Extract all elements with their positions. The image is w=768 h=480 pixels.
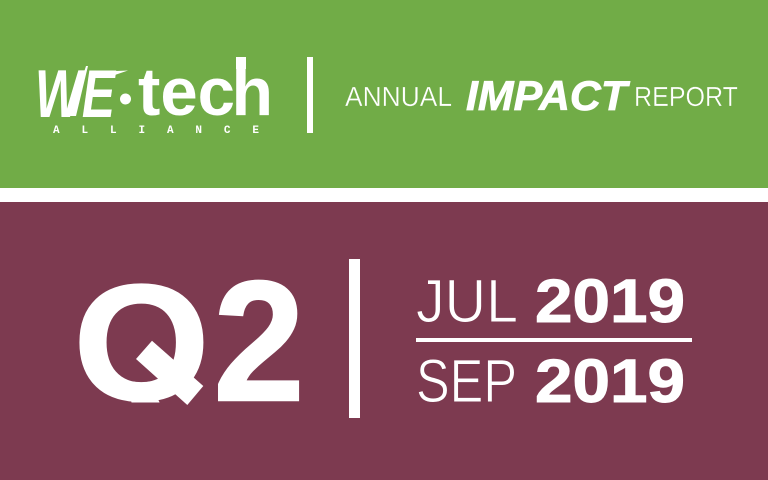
end date: SEP 2019: 2019 bbox=[535, 347, 685, 415]
logo word: tech: tec bbox=[138, 54, 235, 130]
logo word: ALLIANCE: ALLIANCE bbox=[53, 125, 259, 137]
heading word: ANNUAL: ANNUAL bbox=[345, 81, 452, 112]
end date: SEP 2019 bbox=[416, 347, 685, 415]
logo dot bbox=[120, 94, 131, 104]
heading word: REPORT: REPORT bbox=[634, 81, 738, 112]
letter Q: Q bbox=[73, 251, 210, 436]
logo word: tech: h bbox=[232, 54, 273, 130]
panel: maroon quarter band bbox=[0, 202, 768, 480]
start date: JUL 2019: 2019 bbox=[535, 267, 685, 335]
header divider bbox=[307, 57, 313, 133]
digit 2: 2 bbox=[213, 246, 305, 438]
quarter divider bbox=[349, 259, 360, 418]
letter Q bbox=[79, 283, 204, 405]
end date: SEP 2019: SEP bbox=[416, 347, 517, 415]
date range bbox=[416, 267, 692, 415]
quarter label: Q2 bbox=[79, 280, 300, 405]
logo: WE-tech Alliance bbox=[35, 54, 273, 137]
panel: green header band bbox=[0, 0, 768, 188]
date separator line bbox=[416, 338, 692, 342]
start date: JUL 2019: JUL bbox=[416, 267, 518, 335]
logo word: WE: WE bbox=[35, 56, 117, 132]
heading: Annual Impact Report bbox=[345, 72, 738, 119]
heading word: IMPACT: IMPACT bbox=[466, 72, 630, 119]
start date: JUL 2019 bbox=[416, 267, 685, 335]
